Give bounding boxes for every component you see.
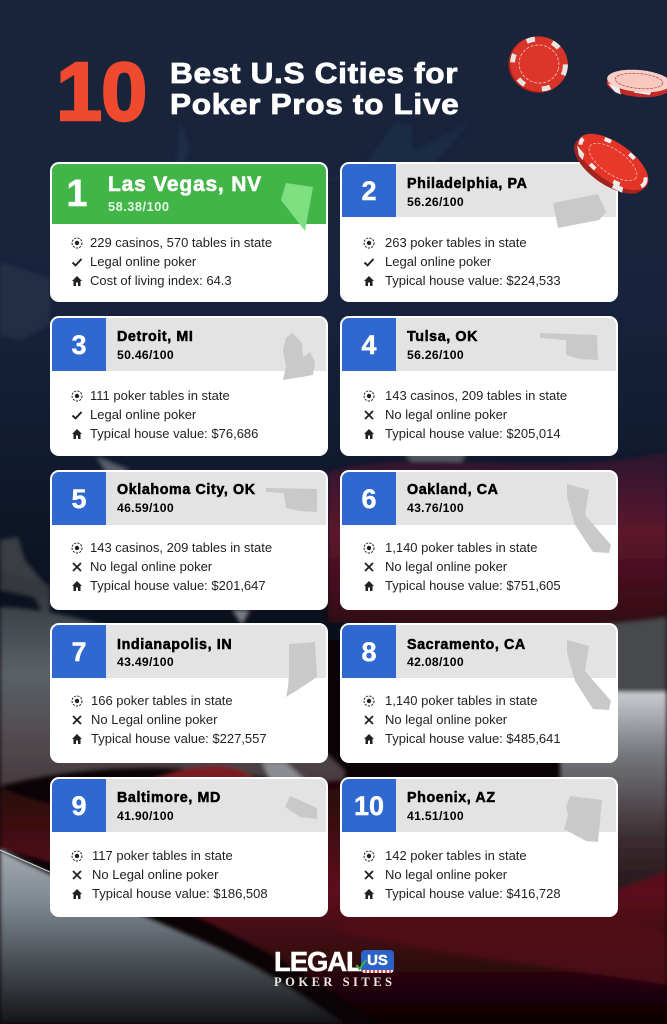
rank: 4 — [361, 330, 377, 360]
rank: 2 — [361, 176, 377, 206]
state shape: California — [567, 640, 611, 710]
header — [52, 625, 326, 678]
row: house value: Typical house value: $224,533 — [385, 273, 561, 288]
chip: top — [502, 30, 574, 100]
card 9: Baltimore — [50, 777, 328, 917]
row: house value: Typical house value: $205,014 — [385, 426, 561, 441]
row: tables: 263 poker tables in state — [385, 235, 527, 250]
rank: 5 — [71, 484, 87, 514]
row: tables: 142 poker tables in state — [385, 848, 527, 863]
green header — [52, 164, 326, 224]
state shape: Maryland — [285, 796, 317, 819]
row: house value: Typical house value: $485,641 — [385, 731, 561, 746]
row: legal: No legal online poker — [90, 559, 212, 574]
card 1: Las Vegas — [50, 162, 328, 302]
city name: Oklahoma City, OK — [117, 482, 256, 498]
title heading: Poker Pros to Live — [170, 89, 459, 121]
rank: 10 — [354, 791, 384, 821]
state shape: Arizona — [564, 796, 602, 842]
title heading: Best U.S Cities for — [170, 58, 458, 90]
logo wordmark: LEGAL — [274, 946, 362, 977]
rank — [342, 318, 396, 371]
rank — [342, 164, 396, 217]
title number 10: 10 — [56, 45, 146, 138]
rank: 7 — [71, 637, 87, 667]
score: 56.26/100 — [407, 348, 464, 362]
state shape: California — [567, 484, 611, 553]
city name: Phoenix, AZ — [407, 790, 496, 806]
header — [52, 779, 326, 832]
card 6: Oakland — [340, 470, 618, 610]
header — [342, 625, 616, 678]
state shape: Oklahoma — [266, 488, 317, 512]
city name: Sacramento, CA — [407, 637, 526, 653]
header — [52, 472, 326, 525]
row: house value: Typical house value: $76,686 — [90, 426, 258, 441]
city name: Philadelphia, PA — [407, 176, 528, 192]
score: 58.38/100 — [108, 199, 169, 214]
score: 56.26/100 — [407, 195, 464, 209]
card 2: Philadelphia — [340, 162, 618, 302]
header — [52, 318, 326, 371]
row: house value — [340, 884, 618, 903]
city name: Indianapolis, IN — [117, 637, 232, 653]
row: legal: No legal online poker — [385, 867, 507, 882]
rank — [342, 472, 396, 525]
row: cost of living: Cost of living index: 64.3 — [90, 273, 232, 288]
card 7: Indianapolis — [50, 623, 328, 763]
header — [342, 472, 616, 525]
state shape: Nevada — [281, 183, 313, 231]
row: legal: No legal online poker — [385, 407, 507, 422]
row: legal: No legal online poker — [385, 712, 507, 727]
row: house value: Typical house value: $751,605 — [385, 578, 561, 593]
row: legal: No Legal online poker — [91, 712, 217, 727]
logo check mark — [355, 958, 367, 971]
row: tables: 111 poker tables in state — [90, 388, 230, 403]
rank — [342, 625, 396, 678]
row: tables: 229 casinos, 570 tables in state — [90, 235, 272, 250]
card 3: Detroit — [50, 316, 328, 456]
card 10: Phoenix — [340, 777, 618, 917]
rank — [342, 779, 396, 832]
logo badge — [361, 950, 394, 973]
title heading — [170, 58, 459, 121]
header — [342, 779, 616, 832]
rank — [52, 472, 106, 525]
chip: right — [606, 67, 667, 100]
row: tables: 117 poker tables in state — [92, 848, 233, 863]
state shape: Pennsylvania — [553, 194, 606, 228]
logo badge: US — [367, 952, 388, 969]
row: legal: Legal online poker — [90, 254, 196, 269]
rank: 8 — [361, 637, 377, 667]
row: tables: 1,140 poker tables in state — [385, 540, 538, 555]
row: house value: Typical house value: $227,557 — [91, 731, 267, 746]
state shape: Michigan — [283, 333, 315, 380]
logo — [272, 948, 398, 992]
score: 46.59/100 — [117, 501, 174, 515]
poker chips — [0, 0, 667, 200]
row: tables: 143 casinos, 209 tables in state — [90, 540, 272, 555]
city name: Oakland, CA — [407, 482, 499, 498]
score: 43.76/100 — [407, 501, 464, 515]
rank: 9 — [71, 791, 87, 821]
city name: Baltimore, MD — [117, 790, 221, 806]
rank — [52, 318, 106, 371]
header — [342, 164, 616, 217]
rank 1: 1 — [66, 173, 88, 215]
chip: lower — [565, 122, 657, 205]
state shape: Indiana — [286, 642, 317, 697]
card 5: Oklahoma City — [50, 470, 328, 610]
logo tagline: POKER SITES — [274, 975, 396, 989]
score: 50.46/100 — [117, 348, 174, 362]
row: house value: Typical house value: $201,647 — [90, 578, 266, 593]
header — [342, 318, 616, 371]
row: house value: Typical house value: $416,728 — [385, 886, 561, 901]
city name: Tulsa, OK — [407, 329, 478, 345]
rank — [52, 625, 106, 678]
rank — [52, 779, 106, 832]
rank: 3 — [71, 330, 87, 360]
row: legal: No Legal online poker — [92, 867, 218, 882]
score: 41.90/100 — [117, 809, 174, 823]
city name: Detroit, MI — [117, 329, 194, 345]
card 8: Sacramento — [340, 623, 618, 763]
score: 42.08/100 — [407, 655, 464, 669]
city name: Las Vegas, NV — [108, 173, 262, 196]
rank: 6 — [361, 484, 377, 514]
row: legal: Legal online poker — [385, 254, 491, 269]
score: 41.51/100 — [407, 809, 464, 823]
row: tables: 166 poker tables in state — [91, 693, 233, 708]
card 4: Tulsa — [340, 316, 618, 456]
row: legal: No legal online poker — [385, 559, 507, 574]
row: tables: 1,140 poker tables in state — [385, 693, 538, 708]
score: 43.49/100 — [117, 655, 174, 669]
state shape: Oklahoma — [540, 333, 598, 360]
row: house value: Typical house value: $186,508 — [92, 886, 268, 901]
row: legal: Legal online poker — [90, 407, 196, 422]
row: tables: 143 casinos, 209 tables in state — [385, 388, 567, 403]
